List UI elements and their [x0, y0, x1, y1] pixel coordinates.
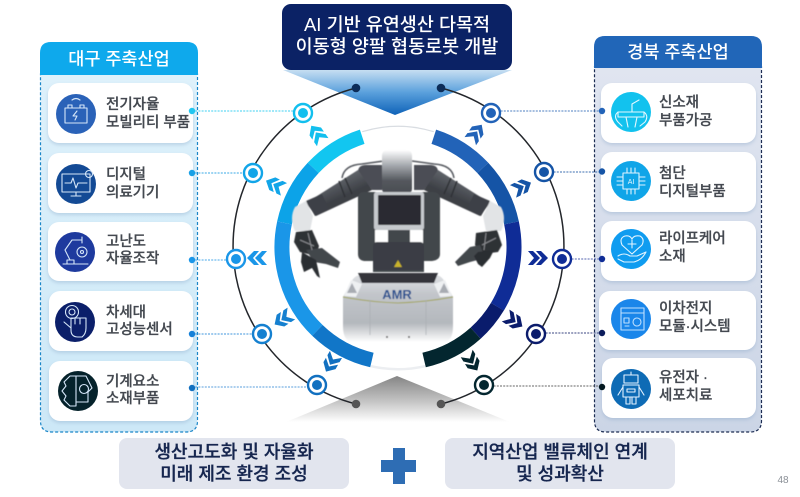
panel: 대구 주축산업 [40, 42, 198, 432]
gradient inner ring [282, 126, 514, 365]
card: 신소재 부품가공 [601, 83, 756, 143]
icon: AI chip: AI [628, 179, 634, 186]
card: 이차전지 모듈·시스템: 모듈·시스템 [659, 318, 731, 335]
connector lines: left [192, 111, 317, 387]
title banner: AI 기반 유연생산 다목적 [304, 14, 490, 35]
card: 전기자율 모빌리티 부품 [48, 83, 193, 143]
card: 라이프케어 소재: 소재 [659, 248, 686, 265]
icon: battery [56, 94, 96, 134]
card: 이차전지 모듈·시스템 [599, 291, 756, 350]
robot cables [342, 161, 454, 178]
robot [292, 150, 504, 342]
card: 첨단 디지털부품: 첨단 [659, 165, 686, 182]
panel: 경북 주축산업 [594, 36, 762, 432]
card: 신소재 부품가공: 부품가공 [659, 112, 712, 129]
card: 차세대 고성능센서: 고성능센서 [106, 321, 173, 338]
card: 라이프케어 소재 [601, 221, 756, 281]
heading: 경북 주축산업: 경북 주축산업 [627, 42, 729, 62]
chevrons: left [247, 122, 342, 375]
card: 기계요소 소재부품: 기계요소 [106, 373, 159, 390]
card: 고난도 자율조작 [48, 222, 193, 281]
card: 디지털 의료기기 [48, 153, 193, 213]
chevrons: right [461, 121, 548, 374]
robot lower column [375, 230, 423, 262]
card: 차세대 고성능센서 [49, 291, 193, 351]
robot screen [374, 192, 424, 230]
title banner [282, 4, 512, 70]
heading: 대구 주축산업: 대구 주축산업 [68, 49, 170, 69]
card: 고난도 자율조작: 고난도 [106, 233, 146, 250]
connector dots: right [599, 108, 605, 390]
card: 유전자·세포치료: 유전자 · [659, 369, 708, 386]
outcome box: 생산고도화: 미래 제조 환경 조성 [160, 464, 308, 484]
card: 고난도 자율조작: 자율조작 [106, 250, 159, 267]
icon: gear head [58, 371, 98, 411]
connector lines: right [484, 111, 602, 386]
card: 유전자·세포치료 [602, 358, 756, 418]
robot right arm [414, 165, 504, 267]
icon: heart in hand [611, 229, 651, 269]
card: 기계요소 소재부품 [49, 361, 193, 421]
card: 디지털 의료기기: 디지털 [106, 166, 146, 183]
ring nodes: right [475, 104, 571, 394]
icon: AI chip [611, 161, 651, 201]
panel body: 대구 [40, 74, 198, 432]
panel body: 경북 [594, 67, 762, 432]
warning label [394, 260, 402, 267]
card: 신소재 부품가공: 신소재 [659, 94, 699, 111]
heading: 대구 주축산업 [40, 42, 198, 75]
ring end dots [352, 84, 445, 408]
page number: 48 [777, 475, 789, 486]
card: 이차전지 모듈·시스템: 이차전지 [659, 300, 712, 317]
outcome box: 지역산업 [445, 438, 675, 489]
outer ring [233, 88, 564, 404]
outcome box: 생산고도화 [119, 438, 349, 489]
robot tower [358, 192, 440, 272]
card: 전기자율 모빌리티 부품: 모빌리티 부품 [106, 114, 190, 131]
connector dots: left [189, 108, 195, 391]
outcome box: 지역산업: 및 성과확산 [516, 464, 604, 484]
robot base [343, 273, 453, 342]
icon: robot arm and gear [55, 232, 95, 272]
robot left arm [292, 165, 382, 278]
robot neck [382, 150, 412, 194]
icon: battery module window [611, 299, 651, 339]
card: 첨단 디지털부품: 디지털부품 [659, 183, 726, 200]
card: 디지털 의료기기: 의료기기 [106, 184, 159, 201]
card: 차세대 고성능센서: 차세대 [106, 304, 146, 321]
robot base: AMR [382, 287, 412, 302]
card: 전기자율 모빌리티 부품: 전기자율 [106, 96, 159, 113]
icon: robot [611, 369, 651, 409]
icon: sensor hand [55, 302, 95, 342]
outcome box: 생산고도화: 생산고도화 및 자율화 [154, 442, 314, 462]
icon: robot dog [611, 92, 651, 132]
icon: medical monitor [56, 164, 96, 204]
top blue triangle [283, 70, 512, 115]
heading: 경북 주축산업 [594, 36, 762, 68]
outcome box: 지역산업: 지역산업 밸류체인 연계 [472, 442, 648, 462]
robot waist [373, 242, 424, 270]
ring nodes: left [227, 104, 326, 394]
card: 라이프케어 소재: 라이프케어 [659, 230, 726, 247]
card: 첨단 디지털부품 [601, 152, 756, 212]
bottom grey triangle [286, 376, 510, 422]
title banner: 이동형 양팔 협동로봇 개발 [296, 36, 498, 57]
card: 기계요소 소재부품: 소재부품 [106, 390, 159, 407]
card: 유전자·세포치료: 세포치료 [659, 387, 712, 404]
plus sign [381, 448, 416, 484]
